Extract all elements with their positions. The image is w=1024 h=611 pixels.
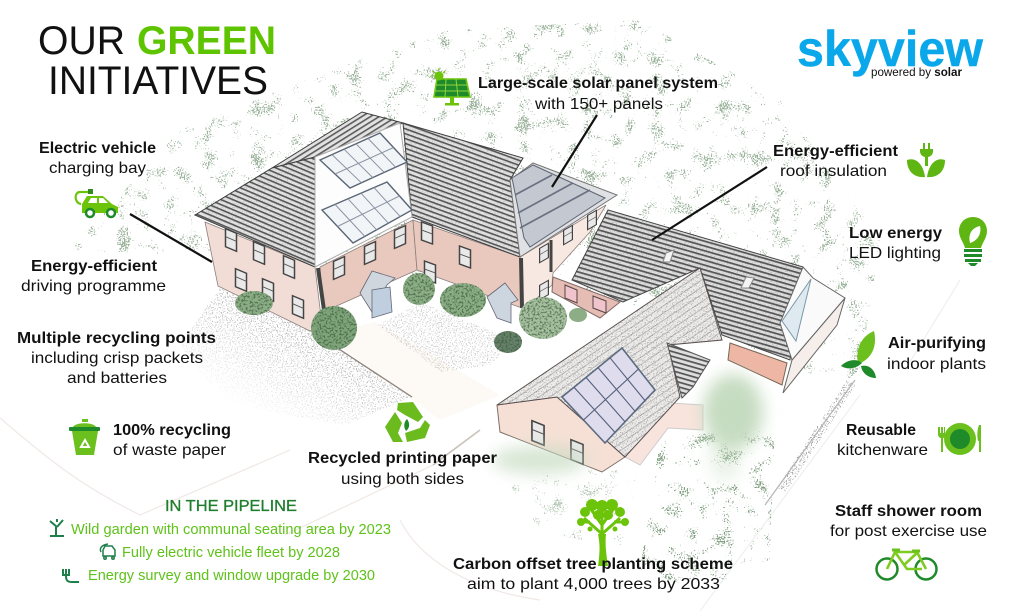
gravel drive and courtyard xyxy=(180,288,515,425)
label: shower room: Staff shower room xyxy=(835,503,982,520)
label: waste paper: of waste paper xyxy=(113,442,227,459)
icon: plate with cutlery xyxy=(938,423,981,455)
label: tree planting xyxy=(453,556,733,593)
icon: recycling bin xyxy=(69,419,100,455)
label: recycled printing paper: Recycled printing paper xyxy=(308,450,497,467)
icon: solar panel xyxy=(431,68,470,106)
label: roof insulation: roof insulation xyxy=(780,163,887,180)
windows xyxy=(226,210,596,318)
solar panels east hip xyxy=(512,165,605,247)
shrubs and trees xyxy=(235,273,763,482)
front wing xyxy=(497,268,722,472)
label: kitchenware: Reusable xyxy=(846,422,916,439)
label: solar panel system: Large-scale solar panel system xyxy=(478,75,718,92)
roof speckle xyxy=(195,157,315,267)
wall corner quoins xyxy=(318,240,551,310)
title: OUR xyxy=(38,19,125,63)
label: EV charging xyxy=(39,140,156,177)
label: EV charging: charging bay xyxy=(49,160,146,177)
roofs xyxy=(195,112,617,267)
label: LED lighting xyxy=(849,225,942,262)
label: waste paper xyxy=(113,422,231,459)
pipeline item 3: Energy survey and window upgrade by 2030 xyxy=(88,568,375,584)
label: kitchenware xyxy=(837,422,928,459)
porches xyxy=(360,271,518,323)
pipeline heading: IN THE PIPELINE xyxy=(165,498,297,515)
solar panels front wing xyxy=(562,348,655,443)
label: driving programme: Energy-efficient xyxy=(31,258,158,275)
skyview logo: powered by solar xyxy=(871,65,962,79)
icon: recycling arrows with leaf xyxy=(385,402,430,442)
icon: plug small xyxy=(63,569,79,582)
pipeline panel xyxy=(50,498,391,584)
walls xyxy=(205,205,606,331)
title: GREEN xyxy=(137,19,276,63)
white hip xyxy=(780,267,845,360)
label: shower room: for post exercise use xyxy=(830,523,987,540)
pink windows xyxy=(565,285,606,313)
roof xyxy=(572,210,803,360)
label: waste paper: 100% recycling xyxy=(113,422,231,439)
road at right xyxy=(700,280,960,611)
label: EV charging: Electric vehicle xyxy=(39,140,156,157)
label: solar panel system xyxy=(478,75,718,113)
title xyxy=(38,19,276,103)
icon: leaves xyxy=(841,331,876,378)
label: solar panel system: with 150+ panels xyxy=(534,96,663,113)
walls xyxy=(552,277,620,318)
label: roof insulation: Energy-efficient xyxy=(773,143,899,160)
icon: electric car small xyxy=(100,544,115,559)
solar panels west roof lower xyxy=(322,182,412,243)
skyview logo: skyview xyxy=(797,21,983,77)
label: indoor plants xyxy=(887,335,986,373)
label: recycling points: including crisp packets xyxy=(31,350,203,367)
pipeline item 2: Fully electric vehicle fleet by 2028 xyxy=(122,545,340,561)
label: LED lighting: Low energy xyxy=(849,225,942,242)
windows xyxy=(571,440,583,464)
main building xyxy=(195,112,617,331)
label: recycling points: Multiple recycling points xyxy=(17,330,216,347)
icon: electric car xyxy=(76,189,118,217)
label: recycling points xyxy=(17,330,216,387)
label: indoor plants: indoor plants xyxy=(887,356,986,373)
label: driving programme: driving programme xyxy=(21,278,166,295)
label: tree planting: aim to plant 4,000 trees by 2033 xyxy=(467,576,720,593)
label: kitchenware: kitchenware xyxy=(837,442,928,459)
vegetation speckle background xyxy=(70,20,880,590)
solar panels west roof upper xyxy=(320,133,407,188)
pointer lines xyxy=(130,115,767,262)
icon: plug with leaves xyxy=(907,143,945,177)
icon: sapling xyxy=(50,519,64,536)
icon: light bulb xyxy=(959,217,987,266)
skylights xyxy=(663,250,754,288)
label: indoor plants: Air-purifying xyxy=(888,335,986,352)
label: tree planting: Carbon offset tree planting scheme xyxy=(453,556,733,573)
label: driving programme xyxy=(21,258,166,295)
label: recycled printing paper: using both sides xyxy=(341,471,464,488)
ground paths xyxy=(0,418,540,600)
icon: tree xyxy=(577,499,629,566)
label: recycling points: and batteries xyxy=(67,370,167,387)
pipeline item 1: Wild garden with communal seating area by 2023 xyxy=(71,522,391,538)
icon: bicycle xyxy=(876,550,936,580)
label: roof insulation xyxy=(773,143,899,180)
label: LED lighting: LED lighting xyxy=(849,245,941,262)
label: shower room xyxy=(830,503,987,540)
rear building xyxy=(552,210,845,393)
label: recycled printing paper xyxy=(308,450,497,488)
title: INITIATIVES xyxy=(48,59,268,103)
